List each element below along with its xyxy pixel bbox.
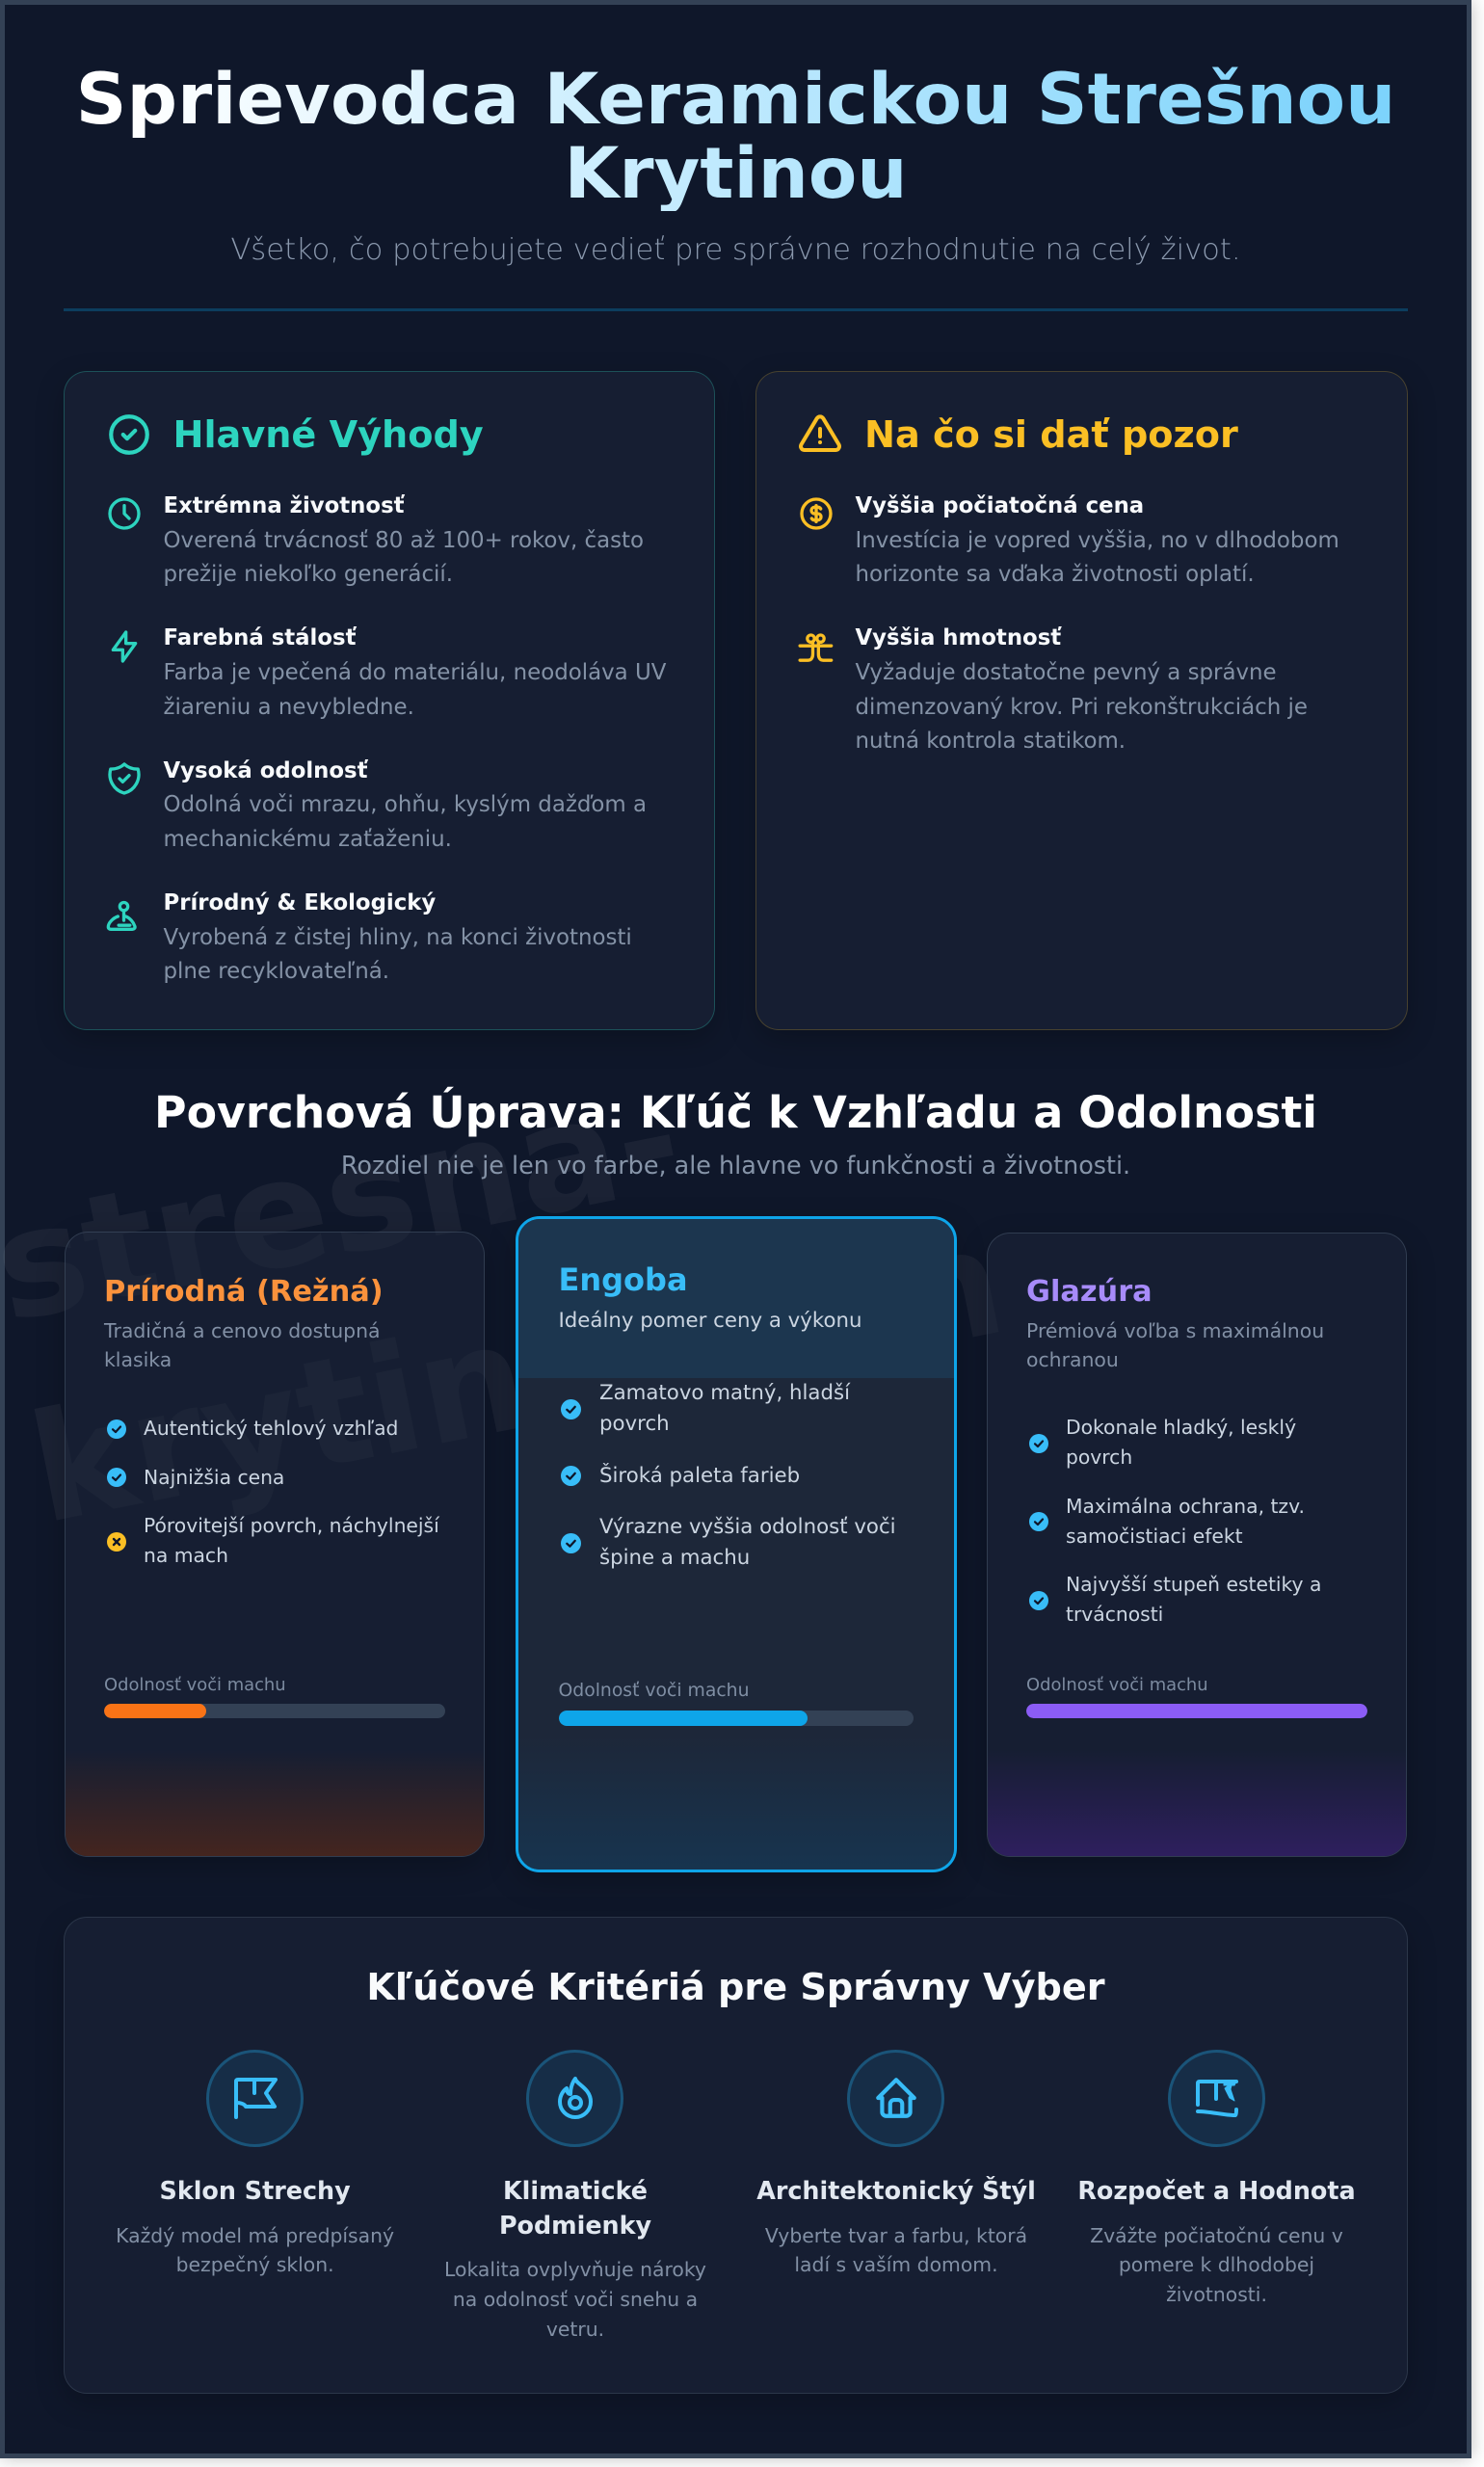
benefit title: Farebná stálosť bbox=[164, 625, 357, 650]
bar: moss resistance 100% bbox=[1026, 1704, 1367, 1718]
benefit title: Prírodný & Ekologický bbox=[164, 890, 436, 915]
feature: Autentický tehlový vzhľad bbox=[144, 1417, 398, 1440]
bar label: Odolnosť voči machu bbox=[1026, 1675, 1208, 1695]
feature bbox=[144, 1514, 439, 1567]
icon badge: architecture bbox=[847, 2050, 944, 2147]
benefit text bbox=[164, 792, 647, 852]
benefit text: žiareniu a nevybledne. bbox=[164, 695, 414, 720]
caution text: Vyžaduje dostatočne pevný a správne bbox=[856, 660, 1277, 685]
caution text: horizonte sa vďaka životnosti oplatí. bbox=[856, 562, 1255, 587]
panel: cautions bbox=[755, 371, 1408, 1030]
caution text: nutná kontrola statikom. bbox=[856, 729, 1126, 754]
criterion: architecture: Vyberte tvar a farbu, ktorá bbox=[765, 2224, 1027, 2247]
icon badge: budget bbox=[1168, 2050, 1265, 2147]
feature: na mach bbox=[144, 1544, 228, 1567]
feature: samočistiaci efekt bbox=[1066, 1525, 1243, 1548]
feature: špine a machu bbox=[599, 1546, 750, 1570]
icon: weight bbox=[798, 633, 833, 662]
card subtitle: klasika bbox=[104, 1348, 172, 1371]
caution text: dimenzovaný krov. Pri rekonštrukciách je bbox=[856, 695, 1308, 720]
caution title: Vyššia počiatočná cena bbox=[856, 493, 1144, 518]
feature: Maximálna ochrana, tzv. bbox=[1066, 1495, 1305, 1518]
criterion: architecture: Architektonický Štýl bbox=[756, 2176, 1036, 2205]
feature: Zamatovo matný, hladší bbox=[599, 1381, 850, 1405]
bar label: Odolnosť voči machu bbox=[104, 1675, 286, 1695]
feature: Široká paleta farieb bbox=[599, 1463, 800, 1488]
section heading: Povrchová Úprava: Kľúč k Vzhľadu a Odolnosti bbox=[154, 1086, 1317, 1138]
icon: check bbox=[1029, 1434, 1048, 1453]
icon: warning triangle bbox=[799, 414, 841, 452]
icon: bolt bbox=[112, 630, 137, 663]
icon: coin bbox=[800, 497, 833, 530]
card subtitle: Prémiová voľba s maximálnou bbox=[1026, 1318, 1324, 1341]
icon: cross bbox=[107, 1532, 126, 1552]
title: Sprievodca Keramickou Strešnou bbox=[76, 59, 1395, 141]
heading: benefits: Hlavné Výhody bbox=[173, 414, 484, 457]
criterion: roof pitch bbox=[116, 2176, 394, 2276]
criterion: climate bbox=[444, 2176, 706, 2341]
card title: Glazúra bbox=[1026, 1275, 1153, 1309]
feature: Dokonale hladký, lesklý bbox=[1066, 1416, 1296, 1439]
icon: check circle bbox=[109, 414, 149, 455]
caution text bbox=[856, 528, 1339, 587]
caution text bbox=[856, 660, 1308, 754]
card subtitle bbox=[1026, 1318, 1324, 1371]
benefit text: Farba je vpečená do materiálu, neodoláva UV bbox=[164, 660, 666, 685]
card title: Prírodná (Režná) bbox=[104, 1275, 384, 1309]
card: engobe finish bbox=[516, 1216, 957, 1872]
criterion: budget: Rozpočet a Hodnota bbox=[1077, 2176, 1356, 2205]
benefit text bbox=[164, 925, 632, 984]
icon: check bbox=[561, 1533, 581, 1553]
feature: povrch bbox=[1066, 1446, 1132, 1469]
icon: clock bbox=[108, 497, 141, 530]
benefit text bbox=[164, 660, 667, 720]
feature: trvácnosti bbox=[1066, 1603, 1163, 1626]
feature: Najnižšia cena bbox=[144, 1465, 284, 1488]
benefit title: Vysoká odolnosť bbox=[164, 758, 368, 783]
feature bbox=[1066, 1416, 1296, 1469]
bar: moss resistance 70% bbox=[559, 1711, 914, 1726]
icon: shield check bbox=[108, 762, 141, 795]
criterion: budget: Zvážte počiatočnú cenu v bbox=[1090, 2224, 1343, 2247]
criterion: budget bbox=[1052, 2174, 1380, 2309]
criterion: climate: vetru. bbox=[546, 2318, 604, 2341]
criterion: climate: na odolnosť voči snehu a bbox=[453, 2288, 698, 2311]
criterion: architecture: ladí s vaším domom. bbox=[794, 2253, 998, 2276]
title bbox=[64, 63, 1408, 211]
card subtitle: Ideálny pomer ceny a výkonu bbox=[559, 1309, 861, 1332]
criterion: roof pitch: bezpečný sklon. bbox=[176, 2253, 334, 2276]
feature bbox=[599, 1515, 896, 1570]
card: natural finish bbox=[65, 1232, 485, 1857]
card subtitle bbox=[104, 1318, 381, 1371]
icon: check bbox=[1029, 1512, 1048, 1531]
benefit title: Extrémna životnosť bbox=[164, 493, 405, 518]
title: Krytinou bbox=[564, 133, 908, 215]
bar label: Odolnosť voči machu bbox=[559, 1681, 749, 1700]
watermark: stresna: stresna- bbox=[0, 1049, 695, 1356]
icon: check bbox=[107, 1468, 126, 1487]
benefit text: mechanickému zaťaženiu. bbox=[164, 827, 452, 852]
caution text: Investícia je vopred vyššia, no v dlhodobom bbox=[856, 528, 1339, 553]
heading: criteria: Kľúčové Kritériá pre Správny Výber bbox=[366, 1966, 1105, 2008]
icon: check bbox=[561, 1399, 581, 1419]
caution title: Vyššia hmotnosť bbox=[856, 625, 1061, 650]
criterion: climate: Lokalita ovplyvňuje nároky bbox=[444, 2258, 706, 2281]
feature: Výrazne vyššia odolnosť voči bbox=[599, 1515, 896, 1539]
panel: benefits bbox=[64, 371, 715, 1030]
feature bbox=[1066, 1495, 1305, 1548]
benefit text: Vyrobená z čistej hliny, na konci životnosti bbox=[164, 925, 632, 950]
card subtitle: ochranou bbox=[1026, 1348, 1119, 1371]
feature: povrch bbox=[599, 1412, 670, 1436]
card subtitle: Tradičná a cenovo dostupná bbox=[104, 1318, 381, 1341]
icon: check bbox=[561, 1466, 581, 1486]
benefit text: prežije niekoľko generácií. bbox=[164, 562, 453, 587]
feature bbox=[599, 1381, 850, 1436]
feature bbox=[1066, 1573, 1321, 1626]
criterion: architecture bbox=[732, 2174, 1060, 2280]
criterion: climate: Klimatické bbox=[503, 2176, 648, 2205]
criterion: budget: životnosti. bbox=[1166, 2283, 1267, 2306]
panel: selection criteria bbox=[64, 1917, 1408, 2394]
criterion: roof pitch: Každý model má predpísaný bbox=[116, 2224, 394, 2247]
benefit text: Odolná voči mrazu, ohňu, kyslým dažďom a bbox=[164, 792, 647, 817]
watermark: krytina: krytina n bbox=[17, 1194, 1018, 1557]
benefit text: plne recyklovateľná. bbox=[164, 959, 389, 984]
icon: nature bbox=[106, 900, 137, 931]
feature: Najvyšší stupeň estetiky a bbox=[1066, 1573, 1321, 1596]
subtitle: Všetko, čo potrebujete vedieť pre správne rozhodnutie na celý život. bbox=[230, 233, 1241, 267]
criterion: climate: Podmienky bbox=[499, 2211, 651, 2240]
section subtitle: Rozdiel nie je len vo farbe, ale hlavne vo funkčnosti a životnosti. bbox=[341, 1151, 1130, 1180]
header divider bbox=[64, 308, 1408, 311]
icon badge: roof pitch bbox=[206, 2050, 304, 2147]
icon badge: climate bbox=[526, 2050, 623, 2147]
heading: cautions: Na čo si dať pozor bbox=[864, 414, 1238, 457]
card: glaze finish bbox=[987, 1233, 1407, 1857]
criterion: budget: pomere k dlhodobej bbox=[1119, 2253, 1314, 2276]
benefit text bbox=[164, 528, 644, 587]
card title: Engoba bbox=[559, 1261, 688, 1298]
bar: moss resistance 30% bbox=[104, 1704, 445, 1718]
benefit text: Overená trvácnosť 80 až 100+ rokov, často bbox=[164, 528, 644, 553]
icon: check bbox=[1029, 1591, 1048, 1610]
feature: Pórovitejší povrch, náchylnejší bbox=[144, 1514, 439, 1537]
icon: check bbox=[107, 1419, 126, 1439]
criterion: roof pitch: Sklon Strechy bbox=[160, 2176, 351, 2205]
